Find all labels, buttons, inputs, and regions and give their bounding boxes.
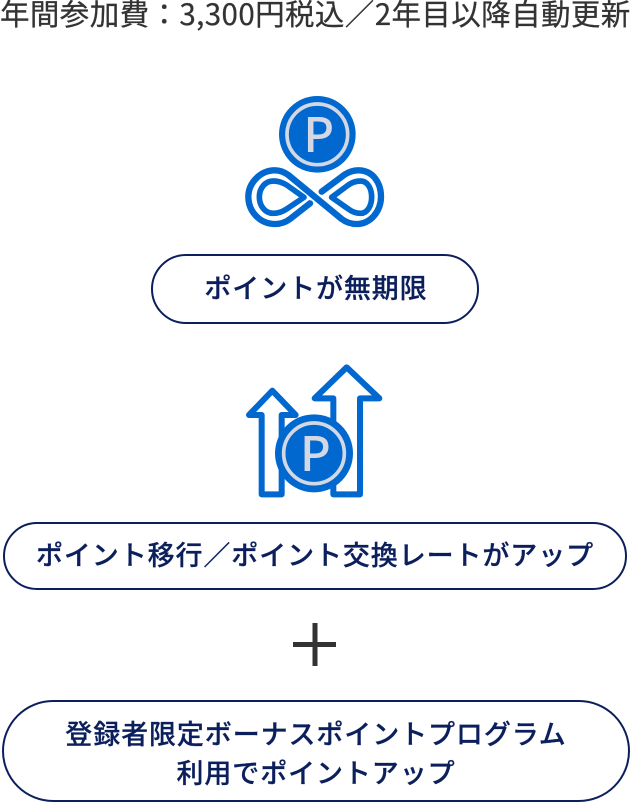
pill: member-only bonus program: 利用でポイントアップ: [176, 752, 456, 791]
pill: member-only bonus program: [3, 701, 629, 801]
pill: point transfer and exchange rate up: ポイント移行／ポイント交換レートがアップ: [36, 534, 594, 573]
icon: coin with infinity symbol: P: [303, 97, 334, 166]
icon: coin with infinity symbol: [248, 96, 381, 224]
icon: rising arrows with coin: [249, 367, 379, 494]
pill: member-only bonus program: 登録者限定ボーナスポイントプログラム: [65, 713, 567, 752]
pill: unlimited points: [152, 255, 478, 323]
icon: rising arrows with coin: P: [300, 416, 331, 485]
icon: plus: [293, 623, 336, 666]
pill: unlimited points: ポイントが無期限: [204, 267, 428, 306]
pill: point transfer and exchange rate up: [4, 523, 626, 589]
